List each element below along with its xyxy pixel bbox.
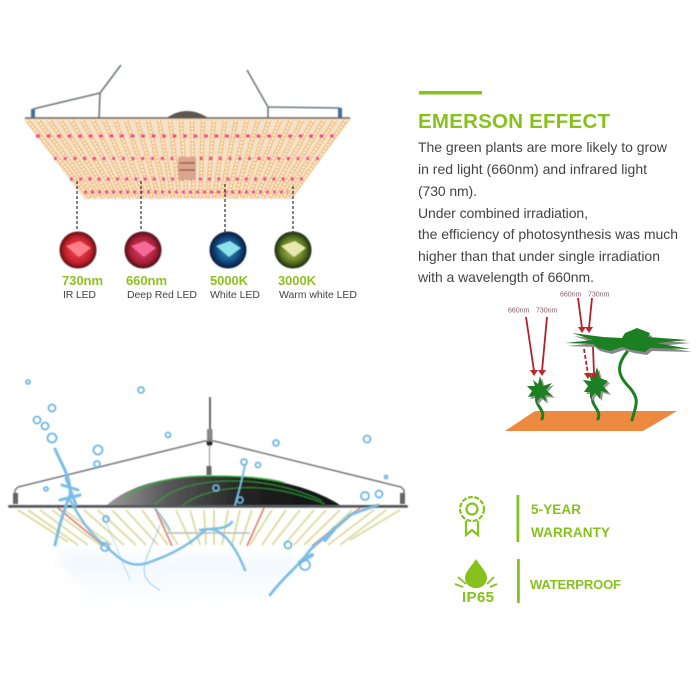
wavelength labels: 660nm — [560, 292, 582, 298]
LED type: 730nm IR: 730nm — [62, 273, 103, 288]
LED type: 660nm deep red: 660nm — [126, 273, 167, 288]
warranty icon — [460, 497, 484, 535]
soil — [505, 411, 677, 431]
LED type: 730nm IR — [60, 232, 103, 301]
waterproof lamp with water splash — [8, 380, 408, 610]
waterproof text: WATERPROOF — [530, 577, 621, 592]
tall plant canopy — [565, 328, 690, 352]
body text: in red light (660nm) and infrared light — [418, 161, 647, 177]
splash haze — [55, 552, 300, 610]
waterproof icon: IP65 — [462, 589, 494, 606]
warranty text: WARRANTY — [531, 525, 610, 540]
waterproof divider — [517, 559, 520, 603]
body text: higher than that under single irradiation — [418, 248, 660, 264]
LED strips below bar — [18, 510, 400, 545]
plant stems — [537, 352, 636, 420]
LED type: 660nm deep red: Deep Red LED — [127, 289, 197, 301]
dashed leader lines — [77, 181, 293, 232]
tall plant canopy shadow — [567, 331, 692, 355]
waterproof icon — [455, 559, 497, 606]
wavelength labels: 730nm — [536, 308, 558, 314]
body text: (730 nm). — [418, 183, 477, 199]
LED light panel, top view — [23, 65, 352, 199]
warranty text — [531, 502, 610, 540]
dome green pattern — [125, 476, 325, 505]
wavelength labels: 660nm — [508, 308, 530, 314]
arrows — [526, 298, 594, 374]
mounting bar — [8, 505, 408, 508]
LED type: 3000K warm white: 3000K — [278, 273, 317, 288]
warranty divider — [516, 495, 519, 542]
body text: with a wavelength of 660nm. — [417, 269, 594, 285]
title: EMERSON EFFECT — [418, 110, 610, 133]
hanging wires — [33, 65, 340, 118]
panel label plate — [178, 157, 196, 180]
LED type: 5000K white — [210, 232, 260, 301]
hanging arm — [15, 441, 404, 504]
LED type: 3000K warm white — [274, 232, 357, 301]
heading accent bar — [419, 91, 482, 94]
small plant middle — [583, 367, 611, 401]
panel board — [23, 118, 352, 199]
body text: Under combined irradiation, — [418, 205, 588, 221]
warranty text: 5-YEAR — [531, 502, 581, 517]
suspension rod — [209, 397, 211, 430]
body text: the efficiency of photosynthesis was much — [418, 226, 678, 242]
LED type: 660nm deep red — [124, 232, 197, 301]
LED type: 730nm IR: IR LED — [63, 289, 96, 301]
body text: The green plants are more likely to grow — [418, 139, 668, 155]
water droplets — [26, 380, 388, 570]
body text — [417, 139, 678, 285]
LED type: 5000K white: White LED — [210, 289, 260, 301]
plant diagram — [505, 292, 692, 431]
LED type: 3000K warm white: Warm white LED — [279, 289, 357, 301]
small plant left — [527, 376, 555, 405]
wavelength labels — [508, 292, 610, 314]
water streams — [55, 449, 378, 595]
red LED rows — [36, 136, 340, 192]
LED strips — [27, 120, 346, 198]
LED type: 5000K white: 5000K — [210, 273, 249, 288]
wavelength labels: 730nm — [588, 292, 610, 298]
driver dome — [107, 476, 340, 505]
driver dome — [165, 111, 210, 119]
red strips — [58, 508, 360, 546]
